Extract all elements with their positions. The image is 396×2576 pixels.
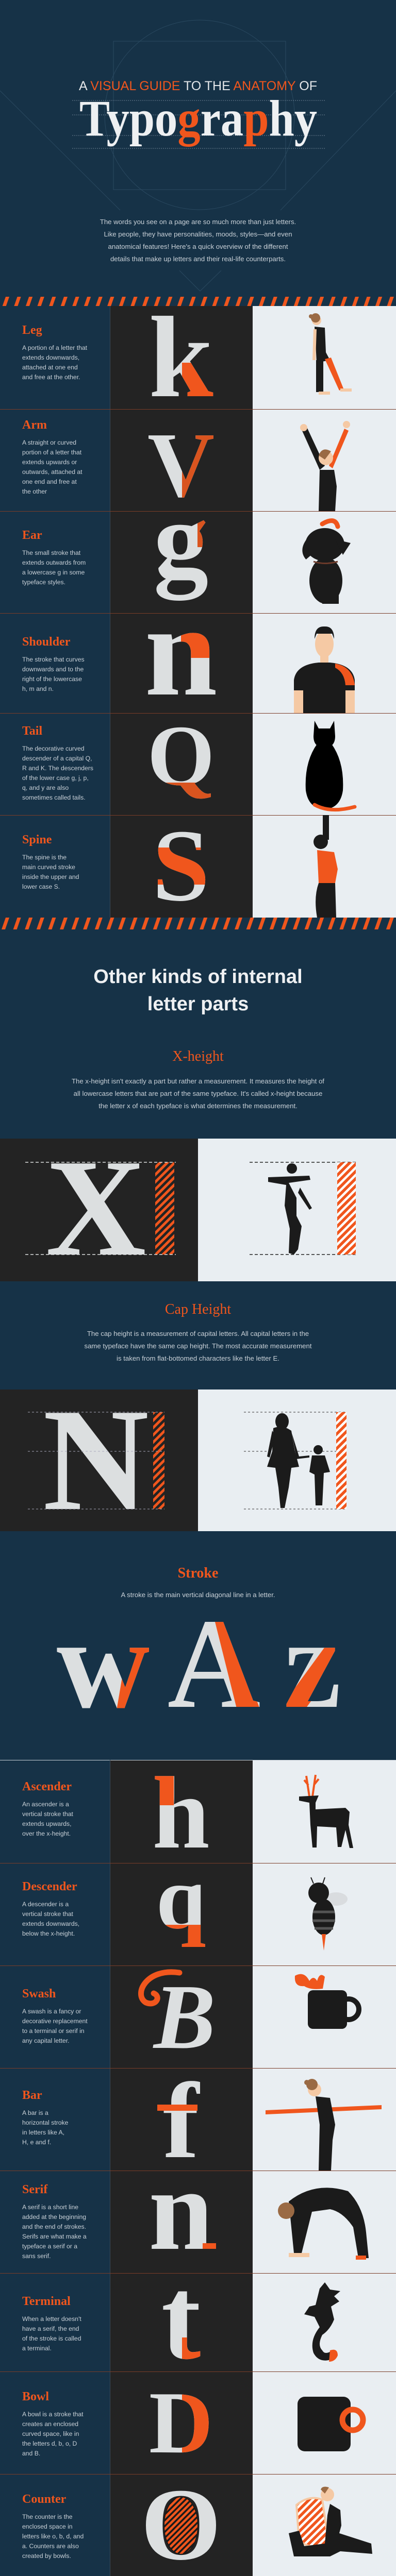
text: Bar: A bar is a xyxy=(22,2109,48,2116)
icon: mother and child xyxy=(267,1413,330,1508)
icon: leg woman xyxy=(309,313,352,395)
letter Q: Q xyxy=(147,708,214,804)
text: Ear: The small stroke that xyxy=(22,549,80,556)
text: Ear: extends outwards from xyxy=(22,559,86,566)
icon: mug splash xyxy=(295,1974,359,2029)
section heading: other kinds: Other kinds of internal xyxy=(93,966,303,988)
text: Leg: and free at the other. xyxy=(22,374,80,381)
text: Shoulder: Shoulder xyxy=(22,635,70,649)
letter n: n xyxy=(144,578,218,723)
letter D bowl: D xyxy=(149,2374,213,2472)
text: Tail: sometimes called tails. xyxy=(22,794,86,801)
header decoration xyxy=(0,20,396,292)
text: Counter: created by bowls. xyxy=(22,2552,71,2560)
stripe band 2 xyxy=(1,918,394,929)
panel: x-height illustration xyxy=(0,1139,396,1281)
text: Tail: The decorative curved xyxy=(22,745,85,752)
text: Arm: the other xyxy=(22,488,47,495)
text: Serif: sans serif. xyxy=(22,2252,51,2260)
intro text: anatomical features! Here's a quick overview of the different xyxy=(108,243,288,250)
letter t terminal xyxy=(163,2292,200,2360)
letter S xyxy=(158,832,205,901)
icon: backbend xyxy=(278,2188,369,2260)
text: Counter: letters like o, b, d, and xyxy=(22,2533,84,2540)
letter V: V xyxy=(147,414,214,516)
text: Serif xyxy=(22,2183,87,2260)
text: Tail: of the lower case g, j, p, xyxy=(22,774,89,782)
text: Shoulder: h, m and n. xyxy=(22,685,54,692)
icon: dog xyxy=(305,521,351,604)
text: Arm xyxy=(22,418,82,495)
text: Serif: A serif is a short line xyxy=(22,2204,78,2211)
panel: letter anatomy rows group 1 xyxy=(0,306,396,918)
text: Terminal xyxy=(22,2295,81,2352)
text: Leg: attached at one end xyxy=(22,364,78,371)
text: Ear: a lowercase g in some xyxy=(22,569,85,576)
text: Counter: Counter xyxy=(22,2493,66,2506)
text: Ascender: extends upwards, xyxy=(22,1820,72,1827)
text: Spine: lower case S. xyxy=(22,883,60,890)
text: Swash: any capital letter. xyxy=(22,2037,69,2044)
letter V xyxy=(148,435,213,498)
text: Leg: A portion of a letter that xyxy=(22,344,87,351)
letter V: V xyxy=(147,414,214,516)
icon: arm person xyxy=(300,421,350,511)
text: Ascender: over the x-height. xyxy=(22,1830,71,1837)
text: Descender: A descender is a xyxy=(22,1901,69,1908)
text: Serif: and the end of strokes. xyxy=(22,2223,86,2230)
text: Tail: q, and y are also xyxy=(22,784,69,791)
text: Swash xyxy=(22,1987,88,2044)
icon: deer xyxy=(299,1775,353,1848)
text: Ascender: Ascender xyxy=(22,1780,72,1793)
icon: mug bowl xyxy=(298,2397,363,2451)
icon: cat xyxy=(306,721,355,810)
icon: bar woman xyxy=(266,2079,382,2171)
letters group 2 xyxy=(138,1760,221,2576)
icon: seahorse xyxy=(304,2282,340,2362)
panel: letter anatomy rows group 2 xyxy=(0,1760,396,2576)
letter t terminal: t xyxy=(161,2252,201,2384)
icon: walking woman xyxy=(268,1163,312,1255)
section heading: other kinds xyxy=(93,966,303,1015)
text: Ascender xyxy=(22,1780,73,1837)
title: Typography xyxy=(79,90,317,147)
text: Bowl: A bowl is a stroke that xyxy=(22,2411,84,2418)
icon: shoulder man xyxy=(294,626,355,713)
letter g: g xyxy=(154,479,208,601)
text: Counter: enclosed space in xyxy=(22,2523,73,2530)
text: X-height description: The x-height isn't exactly a part but rather a measurement. It measures the height of xyxy=(72,1077,324,1085)
text: Descender: Descender xyxy=(22,1880,77,1893)
stripe band 1 xyxy=(2,297,394,306)
text: Ear: typeface styles. xyxy=(22,579,65,586)
text: Ascender: vertical stroke that xyxy=(22,1810,73,1818)
text: Descender xyxy=(22,1880,79,1937)
text: Descender: vertical stroke that xyxy=(22,1910,73,1918)
text: Terminal: of the stroke is called xyxy=(22,2335,81,2342)
text: Serif: added at the beginning xyxy=(22,2213,86,2221)
text: Bar: in letters like A, xyxy=(22,2129,64,2136)
text: Spine: The spine is the xyxy=(22,854,67,861)
text: cap height description: The cap height is a measurement of capital letters. All capital letters in the xyxy=(87,1330,309,1337)
text: X-height description xyxy=(72,1077,324,1110)
letter h xyxy=(155,1776,208,1848)
intro text: Like people, they have personalities, moods, styles—and even xyxy=(104,230,292,238)
illustrations group 2 xyxy=(266,1774,382,2556)
text: Ascender: An ascender is a xyxy=(22,1801,69,1808)
heading: X-height: X-height xyxy=(172,1048,224,1064)
text: Swash: A swash is a fancy or xyxy=(22,2008,81,2015)
text: Serif: typeface a serif or a xyxy=(22,2243,77,2250)
letter B swash: B xyxy=(153,1965,216,2068)
letter g: g xyxy=(154,479,208,601)
text: Arm: portion of a letter that xyxy=(22,449,81,456)
title: A VISUAL GUIDE TO THE ANATOMY OF xyxy=(79,79,317,93)
letter n: n xyxy=(144,578,218,723)
letter D bowl: D xyxy=(149,2374,213,2472)
letter Q: Q xyxy=(147,708,214,804)
text: cap height description: same typeface have the same cap height. The most accurate measurement xyxy=(84,1342,312,1350)
text: Bar xyxy=(22,2089,68,2146)
text: Shoulder: right of the lowercase xyxy=(22,675,82,683)
letter q xyxy=(160,1885,205,1947)
text: Bowl: creates an enclosed xyxy=(22,2420,78,2428)
text: Counter xyxy=(22,2493,84,2560)
letter t terminal: t xyxy=(161,2252,201,2384)
text: Spine: main curved stroke xyxy=(22,863,75,871)
text: Spine: inside the upper and xyxy=(22,873,79,880)
text: cap height description xyxy=(84,1330,312,1362)
text: Leg: extends downwards, xyxy=(22,354,79,361)
text: Arm: one end and free at xyxy=(22,478,77,485)
letters group 1 xyxy=(144,306,218,918)
text: Counter: The counter is the xyxy=(22,2513,73,2520)
text: Swash: to a terminal or serif in xyxy=(22,2027,85,2035)
text: Arm: extends upwards or xyxy=(22,459,77,466)
section heading: other kinds: letter parts xyxy=(147,993,249,1015)
icon: bee xyxy=(308,1877,348,1951)
letters: w A z stroke xyxy=(57,1607,341,1735)
text: Spine xyxy=(22,833,79,890)
icon: spine woman xyxy=(314,815,338,918)
letter q: q xyxy=(156,1848,206,1947)
text: Shoulder: downwards and to the xyxy=(22,666,84,673)
text: Bar: Bar xyxy=(22,2089,42,2102)
text: Swash: Swash xyxy=(22,1987,56,2001)
text: Tail: R and K. The descenders xyxy=(22,765,93,772)
letter n xyxy=(148,633,216,694)
text: Bowl: the letters d, b, o, D xyxy=(22,2440,77,2447)
heading: Cap Height: Cap Height xyxy=(165,1301,231,1317)
icon: counter yoga xyxy=(289,2487,372,2556)
text: Shoulder xyxy=(22,635,85,692)
text: Bar: H, e and f. xyxy=(22,2139,51,2146)
text: Tail: Tail xyxy=(22,724,42,738)
text: Arm: outwards, attached at xyxy=(22,468,82,476)
text: Descender: below the x-height. xyxy=(22,1930,75,1937)
text: Ear: Ear xyxy=(22,529,42,542)
text: Shoulder: The stroke that curves xyxy=(22,656,85,663)
text: Leg xyxy=(22,324,87,381)
text: Counter: a. Counters are also xyxy=(22,2543,79,2550)
text: Arm: Arm xyxy=(22,418,47,432)
text: Serif: Serif xyxy=(22,2183,47,2196)
intro text: details that make up letters and their real-life counterparts. xyxy=(110,255,286,263)
text: Bowl: and B. xyxy=(22,2450,40,2457)
letter f bar: f xyxy=(163,2061,200,2181)
text: Tail xyxy=(22,724,93,801)
text: Serif: Serifs are what make a xyxy=(22,2233,87,2240)
text: Swash: decorative replacement xyxy=(22,2018,88,2025)
text: Spine: Spine xyxy=(22,833,52,846)
text: Bar: horizontal stroke xyxy=(22,2119,68,2126)
text: Arm: A straight or curved xyxy=(22,439,76,446)
letter q: q xyxy=(156,1848,206,1947)
letter Q xyxy=(152,727,211,799)
text: Terminal: have a serif, the end xyxy=(22,2325,79,2332)
text: Leg: Leg xyxy=(22,324,42,337)
text: X-height description: the letter x of each typeface is what determines the measurement. xyxy=(98,1102,298,1110)
text: Terminal: Terminal xyxy=(22,2295,71,2308)
letter n serif: n xyxy=(148,2145,213,2274)
letter D bowl xyxy=(151,2394,209,2452)
text: X-height description: all lowercase letters that are part of the same typeface. It's called x-height because xyxy=(74,1090,322,1097)
letter g xyxy=(156,520,207,601)
text: Bowl: Bowl xyxy=(22,2390,49,2403)
text: Terminal: a terminal. xyxy=(22,2345,52,2352)
panel: cap height illustration xyxy=(0,1389,396,1531)
illustrations group 1 xyxy=(294,313,357,918)
letter k xyxy=(152,315,213,396)
text: Terminal: When a letter doesn't xyxy=(22,2315,81,2323)
heading: Stroke: Stroke xyxy=(178,1565,218,1581)
intro text: The words you see on a page are so much more than just letters. xyxy=(100,218,296,226)
text: Descender: extends downwards, xyxy=(22,1920,79,1927)
text: Tail: descender of a capital Q, xyxy=(22,755,92,762)
text: stroke description: A stroke is the main vertical diagonal line in a letter. xyxy=(121,1591,275,1599)
text: Bowl xyxy=(22,2390,84,2457)
intro text xyxy=(100,218,296,263)
text: Bowl: curved space, like in xyxy=(22,2430,79,2437)
text: Ear xyxy=(22,529,86,586)
text: cap height description: is taken from flat-bottomed characters like the letter E. xyxy=(117,1354,279,1362)
